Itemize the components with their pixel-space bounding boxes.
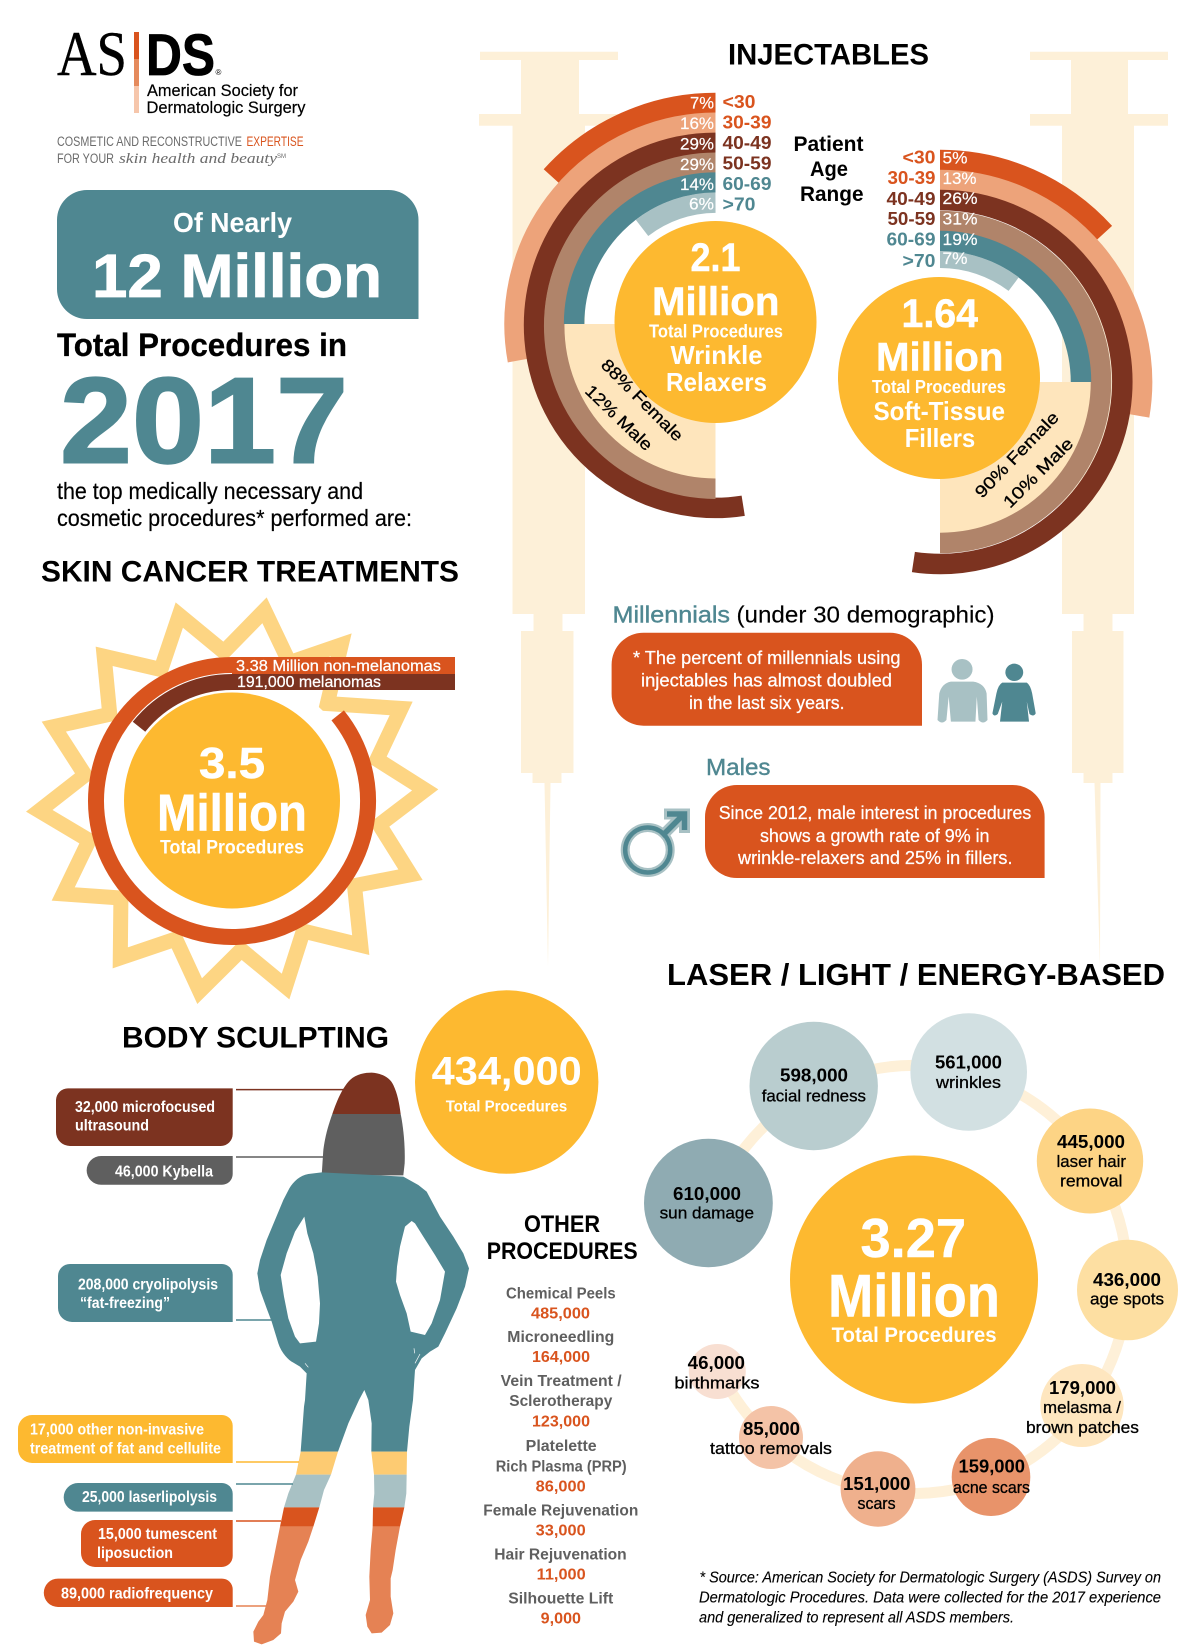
other non-invasive: treatment of fat and cellulite bbox=[30, 1441, 221, 1458]
age labels bbox=[886, 146, 936, 271]
intro text bbox=[57, 478, 412, 531]
total 3.5 million bbox=[157, 739, 307, 858]
procedure list: 86,000 bbox=[536, 1478, 586, 1496]
gender split text: 90% Female bbox=[971, 408, 1063, 502]
center text: Relaxers bbox=[666, 367, 767, 397]
central total: Million bbox=[828, 1262, 1000, 1330]
age labels: 30-39 bbox=[722, 112, 772, 133]
laserlipolysis: 25,000 laserlipolysis bbox=[82, 1489, 217, 1506]
bubble: birthmarks bbox=[674, 1344, 760, 1399]
society name: Dermatologic Surgery bbox=[146, 98, 306, 117]
microfocused ultrasound: 32,000 microfocused bbox=[75, 1099, 215, 1116]
procedure list: Rich Plasma (PRP) bbox=[496, 1458, 627, 1476]
percent labels: 7% bbox=[942, 249, 968, 268]
bubble: sun damage: 610,000 bbox=[673, 1184, 741, 1204]
age rings bbox=[913, 160, 1142, 564]
gold circle bbox=[415, 990, 598, 1174]
total 3.5 million: Total Procedures bbox=[160, 836, 304, 858]
heading: injectables: INJECTABLES bbox=[728, 38, 929, 72]
procedure list: 33,000 bbox=[536, 1522, 586, 1540]
bubble: sun damage bbox=[644, 1139, 773, 1267]
bubble: wrinkles: wrinkles bbox=[935, 1073, 1001, 1092]
age labels bbox=[722, 91, 772, 215]
percent labels: 6% bbox=[689, 194, 714, 214]
center text: 2.1 bbox=[690, 236, 740, 280]
bubble: facial redness: 598,000 bbox=[780, 1066, 848, 1086]
millennials callout text: injectables has almost doubled bbox=[641, 671, 892, 691]
hand details bbox=[305, 1348, 420, 1367]
percent labels: 19% bbox=[942, 230, 978, 249]
males heading: Males bbox=[706, 754, 770, 780]
teal panel bbox=[57, 190, 418, 319]
percent labels: 16% bbox=[680, 114, 714, 133]
bubble: tattoo removals: tattoo removals bbox=[710, 1439, 832, 1458]
heading: PROCEDURES bbox=[487, 1238, 638, 1265]
forehead zone bbox=[332, 1073, 401, 1114]
chart: skin cancer sun bbox=[26, 597, 455, 1004]
age labels: 60-69 bbox=[722, 173, 772, 194]
bubble: age spots: age spots bbox=[1090, 1290, 1164, 1309]
background: left syringe bbox=[479, 52, 618, 967]
age labels: <30 bbox=[722, 91, 756, 112]
age labels: 60-69 bbox=[886, 229, 936, 250]
melanoma ring bbox=[139, 682, 232, 727]
procedure list: Female Rejuvenation bbox=[483, 1502, 638, 1520]
procedure list: Silhouette Lift bbox=[508, 1590, 613, 1608]
tumescent liposuction: 15,000 tumescent bbox=[98, 1526, 217, 1543]
headline block: 12 million bbox=[57, 190, 418, 319]
chart: wrinkle relaxers bbox=[515, 91, 816, 508]
center text: Million bbox=[652, 280, 780, 324]
connecting ring bbox=[713, 1066, 1128, 1494]
total 3.5 million: Million bbox=[157, 784, 307, 842]
source footnote bbox=[699, 1570, 1161, 1627]
millennials heading: Millennials bbox=[612, 602, 730, 628]
bubble: acne scars bbox=[952, 1438, 1030, 1516]
intro text: the top medically necessary and bbox=[57, 478, 363, 504]
chart: laser light energy bubbles bbox=[644, 1013, 1178, 1527]
percent labels: 14% bbox=[680, 175, 714, 194]
males callout text: Since 2012, male interest in procedures bbox=[719, 803, 1031, 823]
age labels: 30-39 bbox=[888, 167, 936, 188]
chin zone bbox=[322, 1114, 405, 1175]
gold circle bbox=[124, 692, 340, 908]
logo wordmark DS: DS bbox=[146, 23, 215, 88]
bubble: sun damage: sun damage bbox=[660, 1204, 754, 1222]
bubble: wrinkles bbox=[910, 1013, 1027, 1131]
bubble: facial redness: facial redness bbox=[762, 1087, 866, 1106]
bubble: melasma brown patches: brown patches bbox=[1026, 1418, 1139, 1437]
age labels: 40-49 bbox=[722, 132, 772, 153]
society name: American Society for bbox=[147, 81, 298, 100]
procedure list: Microneedling bbox=[507, 1329, 614, 1346]
percent labels bbox=[942, 148, 978, 268]
patient age range label: Age bbox=[810, 158, 848, 181]
millennials heading: (under 30 demographic) bbox=[736, 602, 994, 628]
center text: Wrinkle bbox=[670, 340, 762, 370]
millennials section bbox=[612, 602, 1036, 726]
stat: 434,000 total procedures bbox=[415, 990, 598, 1174]
procedure list: 164,000 bbox=[532, 1349, 590, 1366]
age labels: 50-59 bbox=[722, 153, 772, 174]
center text: Total Procedures bbox=[649, 321, 783, 341]
bubble: acne scars: 159,000 bbox=[958, 1457, 1025, 1477]
heading: OTHER bbox=[524, 1211, 600, 1238]
bubble: age spots: 436,000 bbox=[1093, 1270, 1161, 1290]
procedure list: 123,000 bbox=[532, 1414, 590, 1431]
bubble: scars bbox=[841, 1451, 915, 1527]
percent labels: 31% bbox=[942, 210, 978, 229]
source footnote: * Source: American Society for Dermatologic Surgery (ASDS) Survey on bbox=[700, 1570, 1161, 1586]
icon: two people bbox=[938, 659, 1036, 722]
procedure list: Sclerotherapy bbox=[509, 1393, 613, 1410]
tagline: FOR YOUR bbox=[57, 151, 114, 166]
tumescent liposuction bbox=[81, 1520, 233, 1567]
center text: Million bbox=[876, 336, 1004, 380]
leader lines bbox=[236, 1090, 344, 1606]
center text bbox=[872, 292, 1006, 453]
central total: 3.27 bbox=[860, 1207, 966, 1269]
bubble: scars: 151,000 bbox=[843, 1474, 910, 1494]
age labels: 50-59 bbox=[888, 208, 936, 229]
bubble: tattoo removals bbox=[710, 1406, 832, 1469]
bubble: laser hair removal bbox=[1037, 1108, 1143, 1214]
source footnote: Dermatologic Procedures. Data were collected for the 2017 experience bbox=[699, 1589, 1161, 1606]
procedure list: Vein Treatment / bbox=[501, 1373, 622, 1390]
age labels: >70 bbox=[722, 194, 756, 215]
cryolipolysis: 208,000 cryolipolysis bbox=[78, 1277, 218, 1294]
millennials heading bbox=[612, 602, 994, 628]
heading: skin cancer treatments: SKIN CANCER TREATMENTS bbox=[41, 556, 459, 588]
bubble: wrinkles: 561,000 bbox=[935, 1052, 1002, 1072]
percent labels: 5% bbox=[942, 148, 968, 168]
other non-invasive: 17,000 other non-invasive bbox=[30, 1422, 204, 1438]
central total: Total Procedures bbox=[832, 1323, 997, 1347]
radiofrequency: 89,000 radiofrequency bbox=[61, 1586, 213, 1603]
white interior bbox=[104, 673, 360, 929]
kybella bbox=[87, 1156, 233, 1185]
total procedures in: Total Procedures in bbox=[57, 327, 347, 363]
percent labels: 13% bbox=[942, 169, 976, 188]
millennials callout text: in the last six years. bbox=[689, 693, 844, 713]
melanoma bar bbox=[232, 674, 455, 690]
percent labels: 7% bbox=[690, 94, 714, 112]
radiofrequency bbox=[44, 1579, 233, 1607]
thigh zone bbox=[296, 1452, 407, 1475]
kybella: 46,000 Kybella bbox=[115, 1164, 213, 1180]
age labels: <30 bbox=[902, 146, 936, 168]
non-melanoma ring bbox=[96, 665, 368, 937]
central total bbox=[828, 1207, 1000, 1347]
procedure list: Hair Rejuvenation bbox=[494, 1546, 627, 1564]
heading: total procedures in 2017 bbox=[57, 327, 348, 488]
body sculpting silhouette bbox=[253, 1073, 469, 1644]
year 2017: 2017 bbox=[60, 352, 348, 488]
millennials callout text: * The percent of millennials using bbox=[633, 648, 900, 668]
chart: soft-tissue fillers bbox=[838, 146, 1142, 564]
logo divider bbox=[134, 32, 139, 113]
bubble: scars: scars bbox=[858, 1494, 896, 1513]
millennials callout bbox=[612, 633, 922, 726]
bubble: facial redness bbox=[750, 1022, 878, 1150]
patient age range label: Patient bbox=[794, 133, 864, 156]
gender split text: 10% Male bbox=[999, 434, 1077, 512]
sun outline bbox=[26, 597, 438, 1004]
patient age range label: Range bbox=[800, 183, 864, 206]
caption: Total Procedures bbox=[446, 1099, 567, 1116]
procedure list: 485,000 bbox=[531, 1306, 590, 1322]
procedure list: Platelette bbox=[526, 1438, 597, 1455]
procedure list: Chemical Peels bbox=[506, 1285, 616, 1302]
bubble: tattoo removals: 85,000 bbox=[743, 1419, 800, 1439]
tagline: skin health and beauty bbox=[119, 151, 277, 167]
laserlipolysis bbox=[64, 1483, 233, 1512]
logo: ASDS bbox=[57, 18, 306, 167]
gender split text: 88% Female bbox=[597, 355, 687, 445]
males callout text: shows a growth rate of 9% in bbox=[760, 826, 990, 846]
source footnote: and generalized to represent all ASDS members. bbox=[699, 1610, 1014, 1627]
males callout text bbox=[719, 803, 1031, 868]
percent labels bbox=[680, 94, 714, 214]
age rings bbox=[515, 103, 743, 508]
millennials callout text bbox=[633, 648, 900, 713]
other procedures bbox=[483, 1211, 638, 1628]
patient age range label bbox=[794, 133, 864, 206]
males callout bbox=[705, 785, 1045, 878]
gold circle bbox=[838, 277, 1040, 479]
center text: Total Procedures bbox=[872, 377, 1006, 397]
society name bbox=[146, 81, 306, 117]
of nearly: Of Nearly bbox=[173, 207, 292, 238]
gender sector bbox=[940, 382, 1092, 534]
gender sector bbox=[564, 324, 716, 480]
males callout text: wrinkle-relaxers and 25% in fillers. bbox=[737, 848, 1012, 868]
non-melanoma label: 3.38 Million non-melanomas bbox=[236, 658, 441, 675]
gold circle bbox=[614, 221, 816, 423]
bubble: birthmarks: 46,000 bbox=[688, 1353, 745, 1373]
background: right syringe bbox=[1030, 52, 1168, 967]
12 million: 12 Million bbox=[92, 242, 382, 310]
bubble: melasma brown patches: 179,000 bbox=[1049, 1378, 1116, 1398]
other non-invasive bbox=[18, 1415, 233, 1463]
bubble: melasma brown patches: melasma / bbox=[1043, 1398, 1121, 1417]
logo wordmark AS: AS bbox=[57, 18, 127, 89]
percent labels: 26% bbox=[942, 189, 978, 208]
percent labels: 29% bbox=[680, 155, 714, 174]
age labels: >70 bbox=[902, 250, 936, 271]
tagline: COSMETIC AND RECONSTRUCTIVE bbox=[57, 134, 242, 149]
total 3.5 million: 3.5 bbox=[199, 739, 265, 788]
bubble: laser hair removal: laser hair bbox=[1056, 1152, 1126, 1171]
gold central circle bbox=[790, 1156, 1038, 1404]
gender split text: 12% Male bbox=[581, 381, 656, 455]
heading: body sculpting: BODY SCULPTING bbox=[122, 1022, 389, 1054]
bubble: laser hair removal: removal bbox=[1060, 1172, 1122, 1191]
lower thigh zone bbox=[284, 1475, 407, 1507]
center text bbox=[649, 236, 783, 397]
percent labels: 29% bbox=[680, 134, 714, 154]
cryolipolysis: “fat-freezing” bbox=[80, 1295, 170, 1312]
icon: male symbol bbox=[625, 814, 684, 872]
heading bbox=[487, 1211, 638, 1265]
bubble: laser hair removal: 445,000 bbox=[1057, 1132, 1125, 1152]
gender split text bbox=[971, 408, 1077, 512]
age labels: 40-49 bbox=[886, 188, 936, 209]
procedure list: 11,000 bbox=[537, 1567, 586, 1584]
lower legs bbox=[253, 1527, 400, 1644]
bubble: acne scars: acne scars bbox=[953, 1478, 1030, 1497]
center text: Soft-Tissue bbox=[874, 396, 1005, 426]
body sculpting labels bbox=[18, 1088, 344, 1607]
center text: Fillers bbox=[905, 423, 975, 453]
number: 434,000 bbox=[432, 1050, 582, 1094]
melanoma label: 191,000 melanomas bbox=[237, 674, 381, 691]
registered mark: ® bbox=[216, 68, 222, 77]
procedure list: 9,000 bbox=[541, 1611, 581, 1628]
center text: 1.64 bbox=[902, 292, 979, 336]
intro text: cosmetic procedures* performed are: bbox=[57, 505, 412, 531]
tumescent liposuction: liposuction bbox=[97, 1545, 173, 1562]
tagline bbox=[57, 134, 304, 167]
gender split text bbox=[581, 355, 687, 455]
bubble: melasma brown patches bbox=[1026, 1364, 1139, 1447]
bubble: birthmarks: birthmarks bbox=[674, 1374, 760, 1392]
non-melanoma bar bbox=[232, 657, 455, 674]
knee zone bbox=[280, 1507, 404, 1527]
microfocused ultrasound bbox=[56, 1088, 233, 1146]
torso bbox=[257, 1172, 469, 1452]
bubble: age spots bbox=[1077, 1240, 1178, 1340]
heading: laser light energy-based: LASER / LIGHT / ENERGY-BASED bbox=[667, 957, 1165, 992]
tagline: EXPERTISE bbox=[246, 134, 304, 149]
microfocused ultrasound: ultrasound bbox=[75, 1117, 149, 1134]
procedure list bbox=[483, 1285, 638, 1628]
cryolipolysis bbox=[58, 1264, 233, 1322]
males section bbox=[625, 754, 1045, 878]
tagline: SM bbox=[277, 154, 286, 160]
